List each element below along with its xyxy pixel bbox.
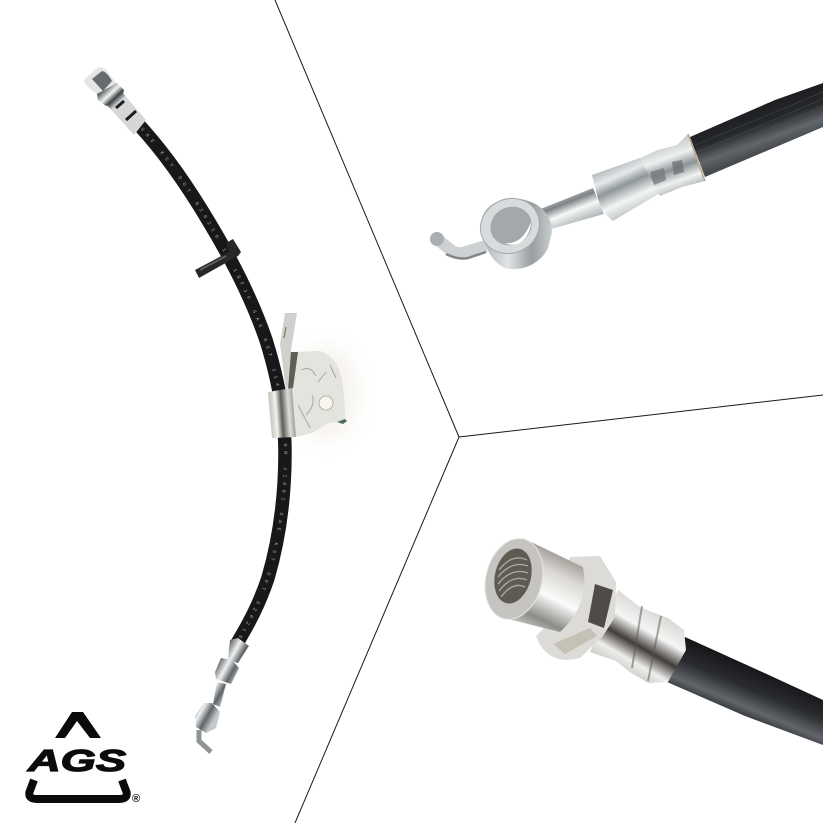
registered mark: ® — [132, 793, 140, 805]
banjo ring — [471, 189, 552, 269]
crimped collar — [590, 590, 686, 683]
stem tube — [538, 188, 604, 231]
hose body — [138, 124, 285, 645]
AGS logo — [27, 712, 140, 805]
hole in bracket — [319, 396, 333, 410]
hook tube — [437, 239, 486, 253]
top female fitting — [84, 67, 146, 135]
panel: threaded fitting close-up — [477, 532, 823, 745]
panel: full brake hose assembly — [84, 68, 358, 754]
bottom crimp and banjo fitting — [195, 638, 249, 752]
logo tray — [29, 780, 127, 799]
logo top chevron — [55, 712, 101, 738]
ribbed hose — [690, 83, 823, 177]
hex nut — [536, 556, 616, 660]
divider lines between panels — [275, 0, 823, 823]
front face — [477, 532, 551, 626]
crimp collar — [640, 134, 705, 196]
hose end — [667, 637, 823, 745]
crimp sleeve — [592, 158, 660, 221]
metal bracket — [268, 313, 347, 438]
hose printed markings: SAE KST DOT 6Z0216 11 18FJF SAE KST J1401 1/8 HR J1401 SAE KST DOT 6Z0216 — [141, 128, 288, 638]
mounting bracket shadow — [293, 347, 357, 439]
clamp band — [268, 388, 296, 438]
hook tip — [430, 232, 444, 246]
logo wordmark: AGS — [27, 743, 126, 778]
panel: banjo fitting close-up — [430, 83, 823, 269]
cylinder body — [500, 538, 584, 632]
hose clip — [195, 239, 241, 278]
